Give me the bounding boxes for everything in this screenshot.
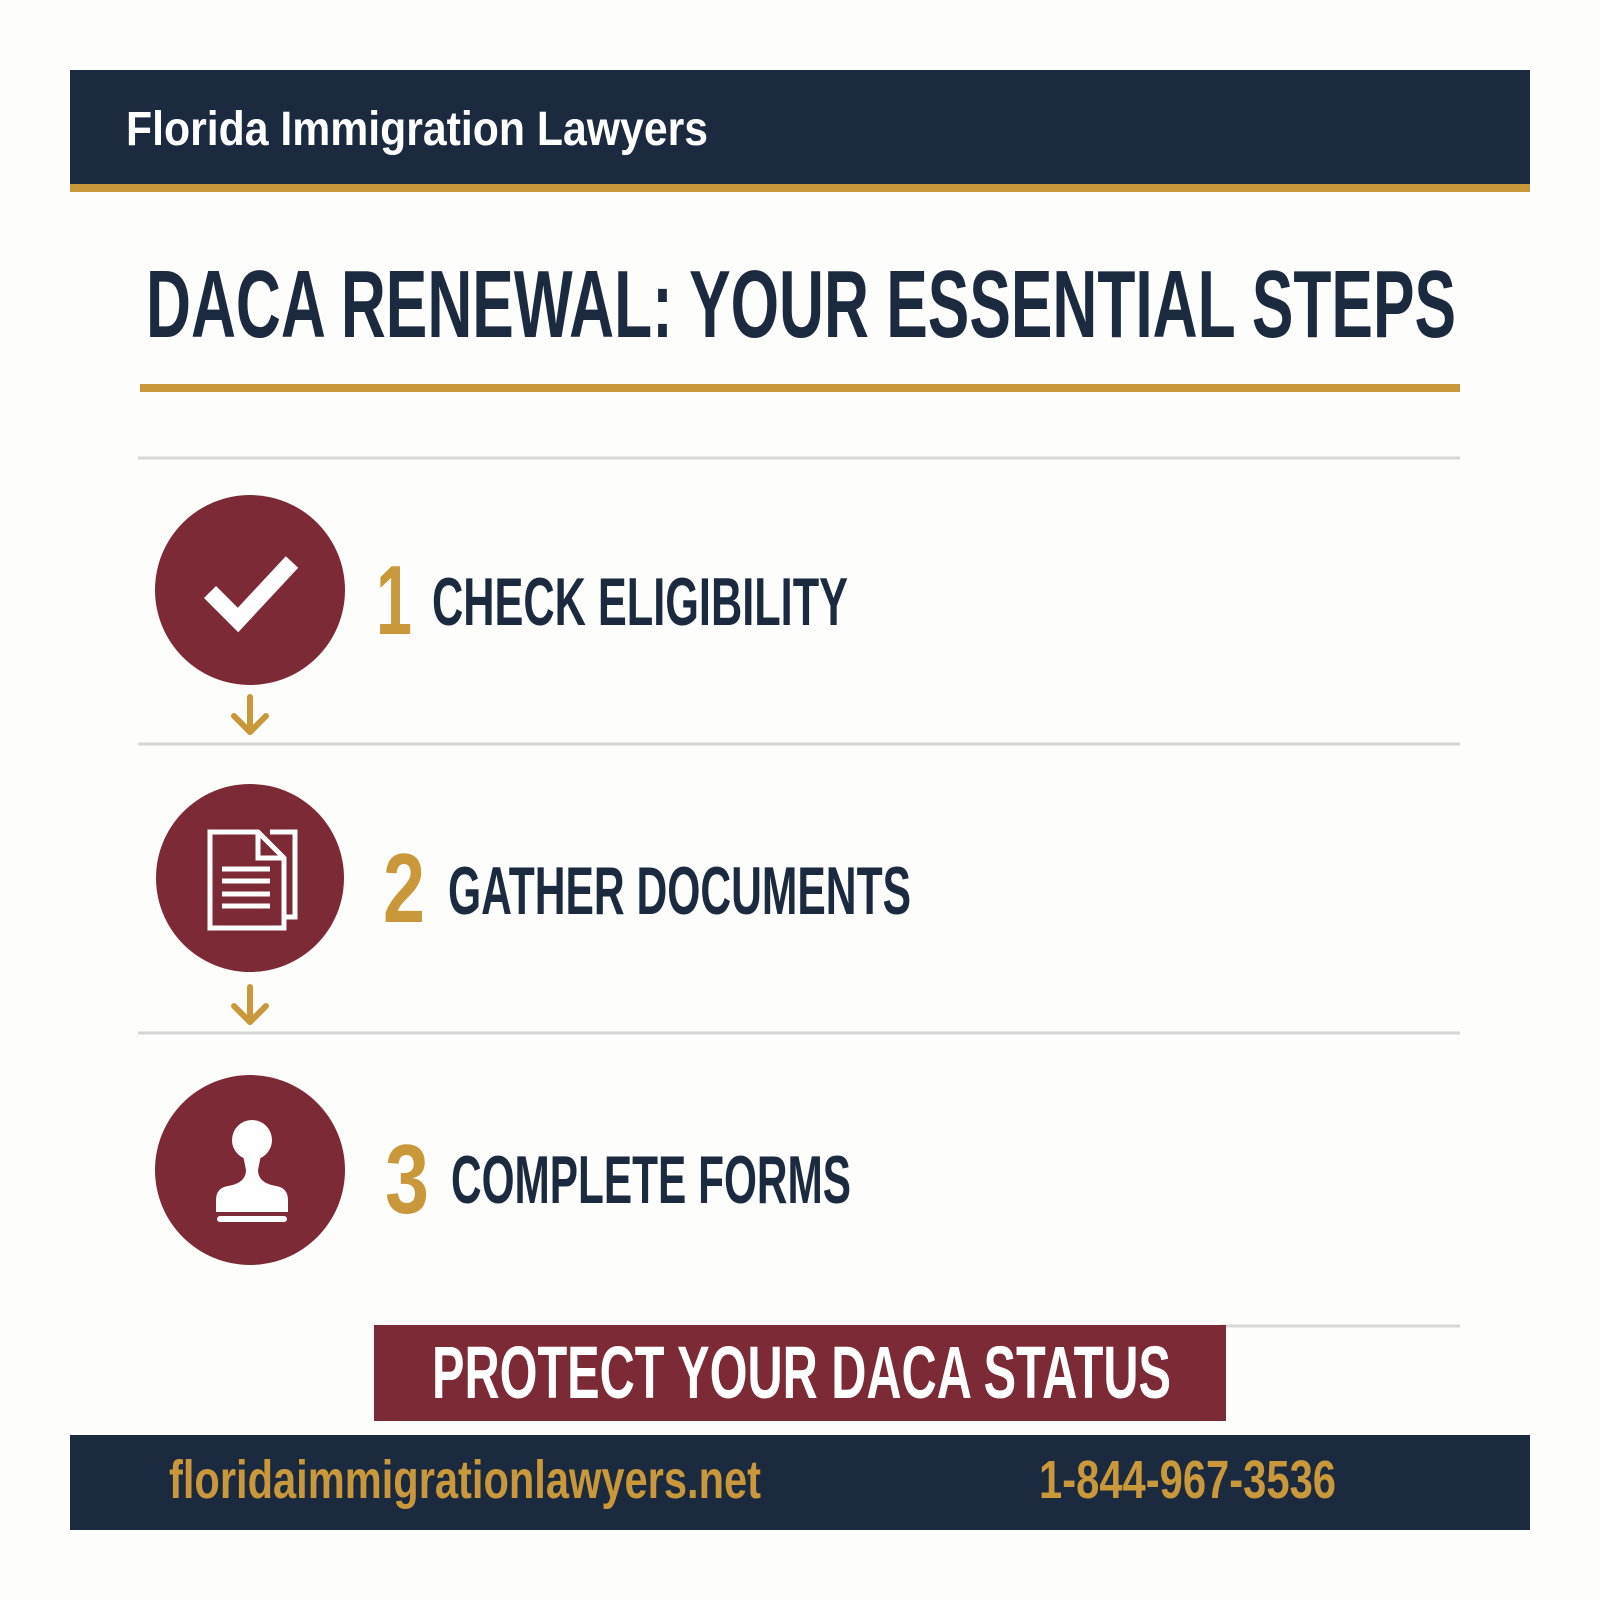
icon: checkmark circle [155, 495, 345, 685]
header bar [70, 70, 1530, 192]
arrow 2 [234, 987, 266, 1022]
icon: documents circle [156, 784, 344, 972]
header brand text: Florida Immigration Lawyers [126, 103, 708, 156]
step number 1: 1 [376, 545, 412, 655]
step label 1: CHECK ELIGIBILITY [432, 564, 848, 640]
step 1: check eligibility [155, 495, 848, 685]
footer bar [70, 1435, 1530, 1530]
arrow 1 [234, 697, 266, 732]
step 2: gather documents [156, 784, 911, 972]
step 3: complete forms [155, 1075, 851, 1265]
step label 3: COMPLETE FORMS [451, 1142, 851, 1218]
step number 2: 2 [383, 833, 425, 943]
footer phone: 1-844-967-3536 [1039, 1450, 1336, 1510]
callout: protect your DACA status: PROTECT YOUR DACA STATUS [432, 1331, 1171, 1414]
icon: stamp circle [155, 1075, 345, 1265]
step number 3: 3 [385, 1124, 429, 1234]
step label 2: GATHER DOCUMENTS [448, 853, 911, 929]
callout: protect your DACA status [374, 1325, 1226, 1421]
footer website: floridaimmigrationlawyers.net [169, 1450, 761, 1510]
